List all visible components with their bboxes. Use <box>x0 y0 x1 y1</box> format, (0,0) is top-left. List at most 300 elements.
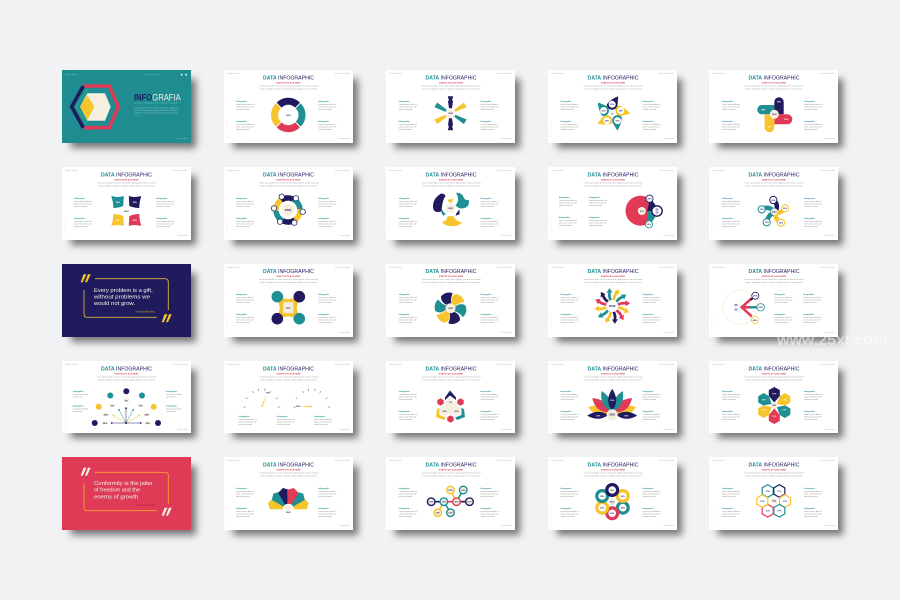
right text: Infographic <box>642 314 654 316</box>
slide header: DATA INFOGRAPHIC <box>748 463 800 469</box>
right text <box>642 390 661 420</box>
left text: amet consectetur elit <box>236 298 254 302</box>
slide header: Presentation Template <box>497 72 512 75</box>
right text <box>480 390 499 420</box>
left text: Lorem ipsum dolor sit <box>74 220 93 223</box>
slide header: Infografia Template <box>227 169 240 172</box>
slide header: DATA INFOGRAPHIC <box>101 173 152 179</box>
chart: arrow: 30% <box>759 307 763 309</box>
chart: arrow: 25% <box>753 296 758 298</box>
slide header: Presentation Template <box>497 362 512 366</box>
right text: amet consectetur elit <box>804 126 822 128</box>
slide header: SUBTITLE PLACE HERE <box>600 82 625 85</box>
left text: Infographic <box>560 508 572 510</box>
chart: network: 15% <box>448 512 452 514</box>
slide header: Company Name <box>824 332 835 334</box>
cover text: Presentation Template <box>145 73 160 76</box>
left text: amet consectetur elit <box>398 318 416 322</box>
slide header: Lorem ipsum dolor sit amet consectetur adipiscing elit sed do eiusmod <box>421 472 480 475</box>
slide header: SUBTITLE PLACE HERE <box>762 179 787 182</box>
slide header <box>65 169 188 237</box>
right text: Lorem ipsum dolor sit <box>804 220 823 223</box>
middle text <box>774 294 793 324</box>
left text: Infographic <box>722 101 734 103</box>
right text: amet consectetur elit <box>480 202 498 206</box>
slide header: tempor incididunt ut labore et dolore magna aliqua ut enim ad minim <box>584 378 641 381</box>
slide header: Infografia Template <box>550 169 563 172</box>
left text: Lorem ipsum dolor sit <box>236 296 255 299</box>
chart: arrow: 20 <box>734 303 738 307</box>
slide header: SUBTITLE PLACE HERE <box>762 372 787 375</box>
slide header: SUBTITLE PLACE HERE <box>600 372 625 375</box>
middle text: sed do eiusmod <box>774 302 788 304</box>
left text: Lorem ipsum dolor sit <box>236 200 255 203</box>
right text: Lorem ipsum dolor sit <box>318 316 337 319</box>
slide header: tempor incididunt ut labore et dolore magna aliqua ut enim ad minim <box>260 378 317 381</box>
slide header: Lorem ipsum dolor sit amet consectetur adipiscing elit sed do eiusmod <box>745 182 803 185</box>
right text: amet consectetur elit <box>642 395 660 398</box>
slide header: Lorem ipsum dolor sit amet consectetur adipiscing elit sed do eiusmod <box>745 85 803 88</box>
left text: Lorem ipsum dolor <box>73 407 89 410</box>
left text: Infographic <box>722 198 734 200</box>
left text: Infographic <box>236 218 248 220</box>
right text: amet consectetur elit <box>804 106 822 108</box>
left text: Lorem ipsum dolor sit <box>722 490 741 493</box>
right text: sed do eiusmod <box>480 496 493 498</box>
slide header: SUBTITLE PLACE HERE <box>762 275 787 278</box>
right text: amet consectetur elit <box>642 492 660 496</box>
left text: amet consectetur elit <box>398 492 416 496</box>
slide: ring network <box>386 457 514 530</box>
right text: Infographic <box>642 294 654 296</box>
right text: Lorem ipsum dolor sit <box>642 510 661 513</box>
right text: Lorem ipsum dolor sit <box>642 412 661 416</box>
slide header <box>388 72 512 140</box>
right text: amet consectetur elit <box>480 492 498 496</box>
slide: five drops <box>548 70 676 142</box>
chart: hex petals: 17% <box>772 393 777 395</box>
right text: Infographic <box>642 508 654 510</box>
slide header: tempor incididunt ut labore et dolore magna aliqua ut enim ad minim <box>422 184 479 188</box>
slide header: tempor incididunt ut labore et dolore magna aliqua ut enim ad minim <box>746 474 803 478</box>
chart: fan: 30% <box>145 414 149 416</box>
slide header: Infografia Template <box>227 459 240 462</box>
chart: petals: 2022 <box>609 412 615 416</box>
right text: Lorem ipsum dolor sit <box>642 123 661 126</box>
right text <box>318 198 337 228</box>
chart: fan: 35% <box>104 414 108 416</box>
slide header: Presentation Template <box>659 459 674 462</box>
left text: amet consectetur elit <box>398 512 416 516</box>
slide: red circle with rings <box>548 167 676 240</box>
middle text: amet consectetur elit <box>774 298 792 302</box>
left text: amet consectetur elit <box>74 222 92 226</box>
chart: plus: 25% <box>767 126 772 128</box>
slide header: Infografia Template <box>388 266 401 269</box>
slide header: Infografia Template <box>550 72 563 75</box>
slide header: SUBTITLE PLACE HERE <box>438 372 463 375</box>
left text: Lorem ipsum dolor sit <box>560 510 579 513</box>
left text: sed do eiusmod <box>722 516 735 518</box>
chart: petals: 10% <box>610 399 614 401</box>
right text: amet consectetur elit <box>804 492 822 496</box>
right text: Infographic <box>166 390 178 392</box>
left text: amet consectetur elit <box>398 106 416 108</box>
right text: sed do eiusmod <box>318 226 332 228</box>
left text: Lorem ipsum dolor sit <box>398 392 417 396</box>
slide header: Company Name <box>339 332 350 334</box>
left text: amet consectetur elit <box>560 318 578 322</box>
chart: circles: 25% <box>647 198 651 200</box>
right text: sed do eiusmod <box>480 302 493 304</box>
chart: circles: 20 <box>655 208 658 212</box>
bottom text: sed do eiusmod <box>239 424 252 426</box>
chart: network: 15% <box>441 502 446 504</box>
left text: Lorem ipsum dolor sit <box>236 103 255 106</box>
chart: leaves: 2022 <box>124 211 129 213</box>
slide header: SUBTITLE PLACE HERE <box>762 82 787 85</box>
right text: Lorem ipsum dolor sit <box>480 510 499 513</box>
left text: Infographic <box>236 101 248 103</box>
right text: Lorem ipsum dolor <box>166 392 182 396</box>
left text: amet consectetur elit <box>558 222 576 224</box>
slide header: Infografia Template <box>65 362 78 366</box>
right text: amet consectetur elit <box>318 222 336 226</box>
right text: amet consectetur elit <box>318 492 336 496</box>
right text: Infographic <box>803 314 815 316</box>
left text: sed do eiusmod <box>560 398 573 400</box>
slide header <box>712 266 835 334</box>
chart: hex petals: 17% <box>762 409 767 411</box>
left text: Lorem ipsum dolor sit <box>398 412 417 416</box>
left text <box>722 198 741 228</box>
right text: Infographic <box>804 508 816 510</box>
right text: amet consectetur elit <box>318 298 336 302</box>
right text: Infographic <box>480 314 492 316</box>
left text: sed do eiusmod <box>236 516 249 518</box>
right text: amet consectetur elit <box>642 415 660 418</box>
right text: amet consectetur elit <box>804 415 822 418</box>
right text: sed do eiusmod <box>642 398 655 400</box>
left text <box>398 294 417 324</box>
cover text: Company Name <box>177 138 188 140</box>
slide: hexagon ring <box>386 360 514 433</box>
chart: swirl rings: 30% <box>783 208 787 210</box>
left text: amet consectetur elit <box>560 298 578 302</box>
slide header: Lorem ipsum dolor sit amet consectetur adipiscing elit sed do eiusmod <box>97 182 156 185</box>
right text: amet consectetur elit <box>804 395 822 398</box>
chart: rings: 25% <box>620 496 625 498</box>
cover text: elit sed do eiusmod tempor incididunt ut labore <box>134 109 178 112</box>
chart: swirl rings: 10% <box>760 209 764 211</box>
right text: sit amet elit <box>166 395 176 398</box>
slide: lotus <box>548 360 676 433</box>
slide header <box>388 266 512 334</box>
slide header: Presentation Template <box>335 459 350 462</box>
slide: ring of arcs with circles <box>224 167 353 240</box>
slide header: Lorem ipsum dolor sit amet consectetur adipiscing elit sed do eiusmod <box>421 375 480 378</box>
left text: sed do eiusmod <box>398 496 412 498</box>
right text: Infographic <box>480 488 492 490</box>
right text: sed do eiusmod <box>804 109 817 111</box>
slide header: DATA INFOGRAPHIC <box>748 173 800 179</box>
right text: sed do eiusmod <box>480 226 493 228</box>
chart: swirl: 2022 <box>448 208 453 210</box>
left text: Infographic <box>398 410 410 412</box>
left text: sed do eiusmod <box>560 496 573 498</box>
slide header: SUBTITLE PLACE HERE <box>276 469 301 472</box>
slide header: DATA INFOGRAPHIC <box>748 366 800 372</box>
left text: Lorem ipsum dolor sit <box>722 123 741 126</box>
right text: amet consectetur elit <box>156 202 174 206</box>
right text: sed do eiusmod <box>642 322 655 324</box>
bottom text: amet consectetur elit <box>277 420 295 423</box>
bottom text: amet consectetur elit <box>314 420 332 423</box>
slide header: Lorem ipsum dolor sit amet consectetur adipiscing elit sed do eiusmod <box>745 375 803 378</box>
slide header: DATA INFOGRAPHIC <box>101 366 152 372</box>
right text <box>804 488 823 518</box>
slide header: SUBTITLE PLACE HERE <box>276 82 301 85</box>
right text: Lorem ipsum dolor sit <box>480 316 499 319</box>
left text: amet consectetur elit <box>236 318 254 322</box>
left text <box>558 197 577 227</box>
slide header: DATA INFOGRAPHIC <box>425 463 476 469</box>
bottom text: sed do eiusmod <box>277 424 290 426</box>
left text: Infographic <box>236 314 248 316</box>
left text <box>236 488 255 518</box>
right text: Lorem ipsum dolor sit <box>480 392 499 396</box>
right text: Lorem ipsum dolor sit <box>803 296 822 299</box>
left text <box>722 390 741 420</box>
slide header: Lorem ipsum dolor sit amet consectetur adipiscing elit sed do eiusmod <box>583 375 642 378</box>
watermark: www.25xt.com <box>777 332 888 349</box>
slide header: tempor incididunt ut labore et dolore magna aliqua ut enim ad minim <box>746 88 803 90</box>
right text: amet consectetur elit <box>642 298 660 302</box>
slide header: Company Name <box>663 428 674 430</box>
left text: Infographic <box>398 314 410 316</box>
left text: amet consectetur elit <box>722 512 740 516</box>
slide header: tempor incididunt ut labore et dolore magna aliqua ut enim ad minim <box>584 281 641 284</box>
slide header: tempor incididunt ut labore et dolore magna aliqua ut enim ad minim <box>260 474 317 478</box>
chart: hex outlines: 17% <box>760 501 765 503</box>
right text: amet consectetur elit <box>480 222 498 226</box>
slide header: SUBTITLE PLACE HERE <box>438 82 463 85</box>
left text: Lorem ipsum dolor sit <box>722 200 741 203</box>
right text: sed do eiusmod <box>642 496 655 498</box>
right text: Lorem ipsum dolor sit <box>804 412 823 416</box>
slide header: tempor incididunt ut labore et dolore magna aliqua ut enim ad minim <box>746 378 803 381</box>
right text: amet consectetur elit <box>318 106 336 108</box>
left text: Infographic <box>236 121 248 123</box>
slide header: Lorem ipsum dolor sit amet consectetur adipiscing elit sed do eiusmod <box>259 182 318 185</box>
slide: hexagon outlines <box>709 457 838 530</box>
right text: Lorem ipsum dolor sit <box>318 123 337 126</box>
bottom text: Infographic <box>314 416 326 418</box>
left text: amet consectetur elit <box>560 492 578 496</box>
middle text: amet consectetur elit <box>588 222 606 224</box>
chart: arrow: 22 <box>734 308 738 312</box>
left text: sed do eiusmod <box>74 206 87 208</box>
slide header <box>712 169 835 237</box>
left text: sed do eiusmod <box>398 516 412 518</box>
right text: amet consectetur elit <box>480 106 498 108</box>
chart: rings: 2022 <box>609 502 615 504</box>
slide header: DATA INFOGRAPHIC <box>425 366 476 372</box>
slide header <box>65 362 188 430</box>
left text: sed do eiusmod <box>398 418 412 420</box>
right text: amet consectetur elit <box>642 106 660 108</box>
right text: Infographic <box>166 405 178 407</box>
right text: amet consectetur elit <box>804 202 822 206</box>
slide header: Infografia Template <box>550 266 563 269</box>
chart: arrow: 45% <box>753 319 757 322</box>
slide header: SUBTITLE PLACE HERE <box>600 469 625 472</box>
left text: amet consectetur elit <box>74 202 92 206</box>
slide header: SUBTITLE PLACE HERE <box>762 469 787 472</box>
left text: Lorem ipsum dolor sit <box>560 123 579 126</box>
quote text: Conformity is the jailer <box>94 481 153 487</box>
slide header: tempor incididunt ut labore et dolore magna aliqua ut enim ad minim <box>260 281 317 284</box>
slide header: Presentation Template <box>820 459 835 462</box>
left text: Infographic <box>558 217 570 219</box>
left text: Infographic <box>398 508 410 510</box>
middle text: Infographic <box>774 314 786 316</box>
left text: Infographic <box>560 410 572 412</box>
right text: Lorem ipsum dolor sit <box>318 510 337 513</box>
slide header: DATA INFOGRAPHIC <box>587 463 638 469</box>
slide header: tempor incididunt ut labore et dolore magna aliqua ut enim ad minim <box>422 378 479 381</box>
right text: sed do eiusmod <box>804 129 817 131</box>
chart: hex petals: 17% <box>783 399 787 401</box>
chart: arcs: 2022 <box>285 208 292 212</box>
left text: Lorem ipsum dolor sit <box>236 316 255 319</box>
chart: fan: 2022 <box>286 512 291 514</box>
left text: sed do eiusmod <box>722 226 735 228</box>
right text <box>480 198 499 228</box>
slide header <box>227 169 350 237</box>
right text: sed do eiusmod <box>642 109 655 111</box>
slide header <box>227 266 350 334</box>
right text: Infographic <box>804 198 816 200</box>
slide header: Presentation Template <box>820 362 835 366</box>
left text: Lorem ipsum dolor sit <box>558 199 577 202</box>
left text: Infographic <box>722 410 734 412</box>
right text: Infographic <box>480 121 492 123</box>
quote text: – Antonio Pacheco <box>135 310 156 314</box>
right text: sed do eiusmod <box>480 109 493 111</box>
right text: Lorem ipsum dolor sit <box>642 490 661 493</box>
chart: network <box>427 486 473 516</box>
cover text: Infografia Template <box>65 73 78 76</box>
chart: network: 10% <box>429 502 433 504</box>
right text: Infographic <box>318 314 330 316</box>
bottom text: Lorem ipsum dolor sit <box>277 418 295 420</box>
chart: hex petals <box>756 386 793 424</box>
left text: sed do eiusmod <box>560 129 573 131</box>
left text: sed do eiusmod <box>560 516 573 518</box>
right text: Infographic <box>156 198 168 200</box>
slide header: SUBTITLE PLACE HERE <box>276 372 301 375</box>
chart: right gauge: 25% <box>296 406 300 408</box>
right text: Lorem ipsum dolor sit <box>480 490 499 493</box>
slide header: Company Name <box>663 332 674 334</box>
cover text: quis <box>134 115 140 117</box>
slide header: Presentation Template <box>497 266 512 269</box>
left text: amet consectetur elit <box>398 298 416 302</box>
chart: fan: 25% <box>103 422 107 424</box>
slide header: Infografia Template <box>712 72 725 75</box>
slide header: SUBTITLE PLACE HERE <box>114 372 139 375</box>
left text: Infographic <box>560 101 572 103</box>
slide header: Company Name <box>339 138 350 140</box>
left text: Infographic <box>560 390 572 392</box>
left text <box>398 198 417 228</box>
chart: swirl rings: 10% <box>765 222 769 224</box>
chart: network: 10% <box>467 502 471 504</box>
left text: Lorem ipsum dolor sit <box>722 510 741 513</box>
right text: Lorem ipsum dolor sit <box>803 316 822 319</box>
slide header: SUBTITLE PLACE HERE <box>600 275 625 278</box>
left text: Lorem ipsum dolor sit <box>722 392 741 396</box>
slide header <box>550 72 674 140</box>
slide header: Company Name <box>339 235 350 237</box>
slide header: Presentation Template <box>335 362 350 366</box>
left text: sed do eiusmod <box>236 302 249 304</box>
left text: amet consectetur elit <box>398 395 416 398</box>
slide header: Company Name <box>824 138 835 140</box>
slide header: DATA INFOGRAPHIC <box>263 173 314 179</box>
right text: sed do eiusmod <box>804 226 817 228</box>
slide header: Company Name <box>501 428 512 430</box>
slide: cover <box>62 70 191 142</box>
slide header: DATA INFOGRAPHIC <box>748 76 800 82</box>
slide header <box>388 459 512 527</box>
slide header: Company Name <box>824 525 835 527</box>
right text: Lorem ipsum dolor sit <box>480 103 499 106</box>
slide header: Lorem ipsum dolor sit amet consectetur adipiscing elit sed do eiusmod <box>259 375 318 378</box>
right text: amet consectetur elit <box>318 512 336 516</box>
slide header: Infografia Template <box>712 362 725 366</box>
left text: amet consectetur elit <box>722 126 740 128</box>
right text: Infographic <box>480 508 492 510</box>
slide header: tempor incididunt ut labore et dolore magna aliqua ut enim ad minim <box>746 281 803 284</box>
left text <box>560 390 579 420</box>
chart: leaves: 25% <box>133 202 137 204</box>
left text: amet consectetur elit <box>722 202 740 206</box>
chart: drops: 32% <box>615 120 619 122</box>
slide header: Company Name <box>339 525 350 527</box>
slide header <box>712 459 835 527</box>
right text: Infographic <box>803 294 815 296</box>
right text: sed do eiusmod <box>804 398 817 400</box>
left text: amet consectetur elit <box>236 492 254 496</box>
right text: Infographic <box>318 294 330 296</box>
right text: Infographic <box>480 101 492 103</box>
slide header <box>550 169 674 237</box>
right text: sed do eiusmod <box>318 109 332 111</box>
right text: amet consectetur elit <box>480 395 498 398</box>
chart: spokes: 2022 <box>448 113 453 115</box>
right text <box>156 198 175 228</box>
chart: arrow <box>723 290 764 324</box>
chart: hex petals: 17% <box>782 409 787 411</box>
bottom text <box>239 416 333 426</box>
slide header <box>227 362 350 430</box>
slide header: Lorem ipsum dolor sit amet consectetur adipiscing elit sed do eiusmod <box>583 85 642 88</box>
quote text <box>94 288 156 314</box>
right text: Infographic <box>318 198 330 200</box>
slide header: Lorem ipsum dolor sit amet consectetur adipiscing elit sed do eiusmod <box>583 472 642 475</box>
